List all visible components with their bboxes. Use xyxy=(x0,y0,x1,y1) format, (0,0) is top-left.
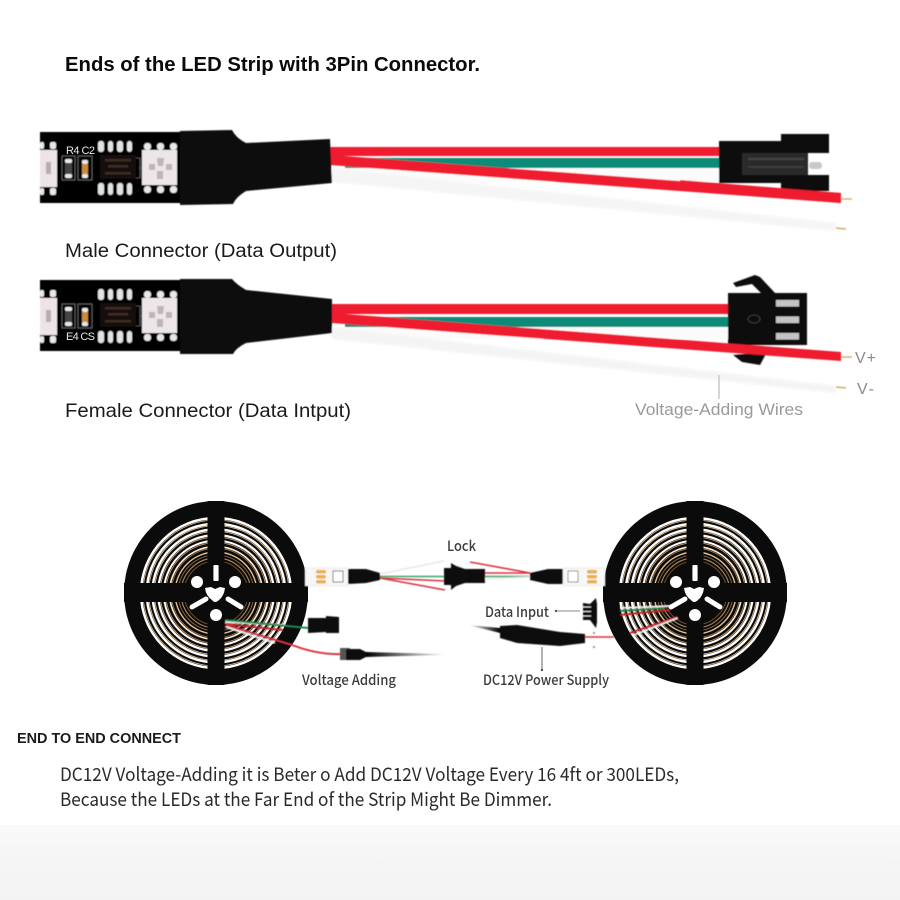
red wire top xyxy=(332,304,730,314)
title: Ends of the LED Strip with 3Pin Connector. xyxy=(65,54,480,76)
male connector caption: Male Connector (Data Output) xyxy=(65,241,337,262)
left strip segment xyxy=(305,568,349,586)
voltage adding label: Voltage Adding xyxy=(301,670,396,690)
right reel wire bundle xyxy=(620,606,678,635)
wiring diagram xyxy=(225,561,678,660)
red wire top xyxy=(330,147,721,156)
left voltage plug xyxy=(340,648,445,660)
3-pin female connector xyxy=(728,275,807,365)
left reel wire bundle xyxy=(225,620,342,654)
power supply cable taper xyxy=(468,625,500,633)
data input label: Data Input xyxy=(485,602,549,622)
wire pin tips xyxy=(836,199,852,229)
right span wires xyxy=(470,562,530,579)
left black boot xyxy=(348,569,380,584)
left plug male xyxy=(308,616,339,633)
power supply red wire xyxy=(585,636,614,638)
right reel xyxy=(603,501,787,685)
white wires xyxy=(332,327,836,393)
description text xyxy=(60,761,679,812)
data input female connector xyxy=(583,598,597,628)
female connector caption: Female Connector (Data Intput) xyxy=(65,401,351,422)
teal data wire xyxy=(345,317,730,327)
white wires xyxy=(330,168,836,231)
polarity dots xyxy=(593,632,595,648)
red voltage wire xyxy=(332,313,841,361)
left span wires xyxy=(380,561,445,590)
heat-shrink sleeve xyxy=(180,130,332,205)
red voltage wire xyxy=(330,155,841,203)
power supply pointer xyxy=(541,647,543,671)
lock label: Lock xyxy=(447,536,476,556)
right black boot xyxy=(530,569,563,584)
V- label: V- xyxy=(857,381,874,398)
teal data wire xyxy=(345,158,721,168)
male connector strip photo xyxy=(40,130,852,231)
R4 C5 PCB label: E4 CS xyxy=(66,331,95,343)
data input pointer xyxy=(555,610,580,612)
DC12V power supply label: DC12V Power Supply xyxy=(483,670,609,690)
3-pin male connector xyxy=(719,134,829,191)
end to end heading: END TO END CONNECT xyxy=(17,731,181,747)
PCB section xyxy=(40,280,182,351)
description line 1: DC12V Voltage-Adding it is Beter o Add DC12V Voltage Every 16 4ft or 300LEDs, xyxy=(60,761,679,787)
DC12V power supply connector xyxy=(500,625,585,646)
lock connector xyxy=(444,563,485,590)
left reel xyxy=(124,501,308,685)
voltage-adding wires label: Voltage-Adding Wires xyxy=(635,401,803,419)
red voltage wire overlap xyxy=(680,180,841,203)
description line 2: Because the LEDs at the Far End of the Strip Might Be Dimmer. xyxy=(60,786,552,812)
R4 C2 PCB label: R4 C2 xyxy=(66,145,95,157)
PCB section xyxy=(40,132,182,203)
wire pin tips xyxy=(836,357,852,388)
right strip segment xyxy=(563,568,605,586)
voltage-adding wires pointer xyxy=(718,375,720,399)
heat-shrink sleeve xyxy=(180,279,332,354)
female connector strip photo xyxy=(40,275,852,393)
bottom floor shading xyxy=(0,825,900,900)
V+ label: V+ xyxy=(855,350,876,367)
